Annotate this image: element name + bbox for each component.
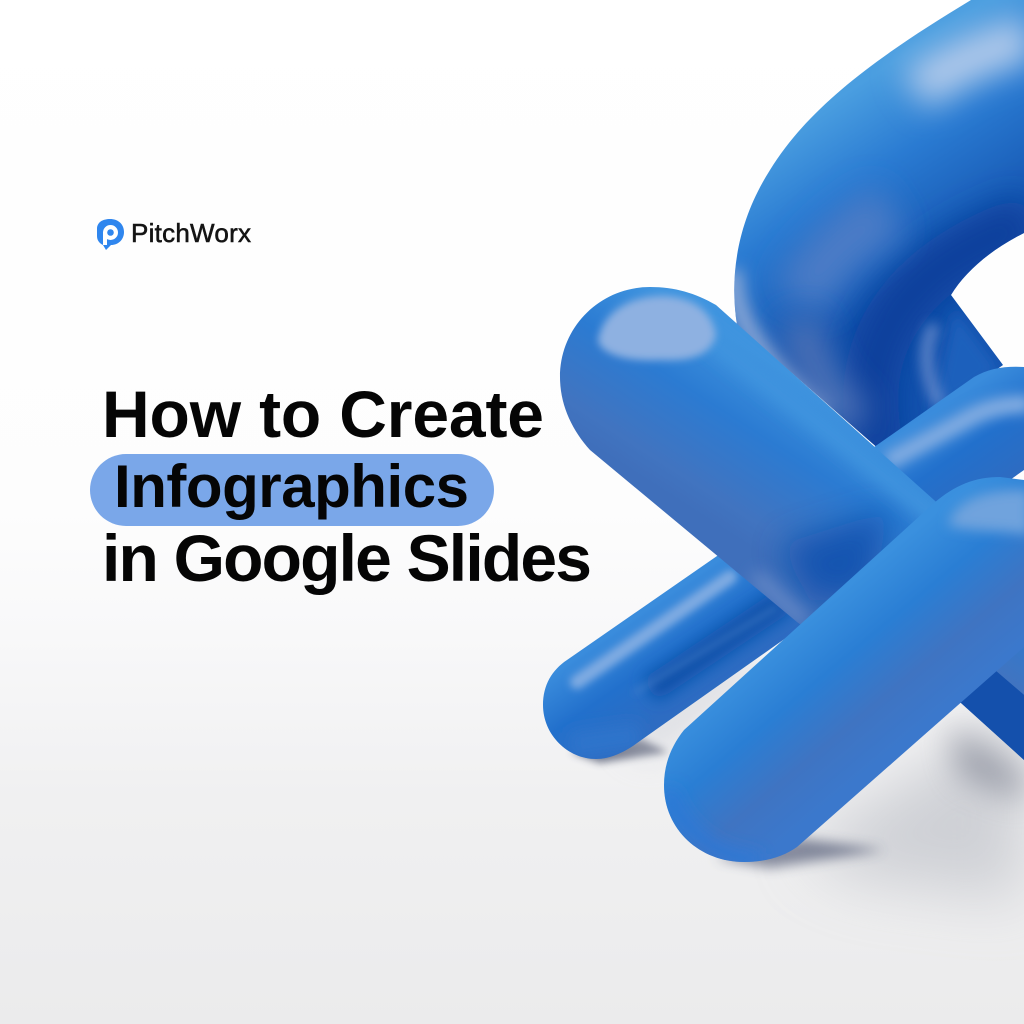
icon: speech bubble P [97, 219, 124, 250]
highlight pill [90, 454, 494, 526]
title line 1: How to Create [102, 377, 544, 451]
title line 2: Infographics [114, 453, 469, 520]
logo wordmark: PitchWorx [131, 218, 251, 248]
illustration: large left tube [560, 287, 1024, 770]
title [90, 377, 592, 595]
title line 3: in Google Slides [102, 521, 592, 595]
illustration: back arch tube [734, 0, 1024, 460]
highlighted title line [90, 453, 494, 526]
illustration: front tube [664, 477, 1024, 862]
logo: PitchWorx [97, 218, 251, 250]
floor shadows [570, 660, 1024, 900]
illustration: thin diagonal tube [543, 367, 1024, 759]
